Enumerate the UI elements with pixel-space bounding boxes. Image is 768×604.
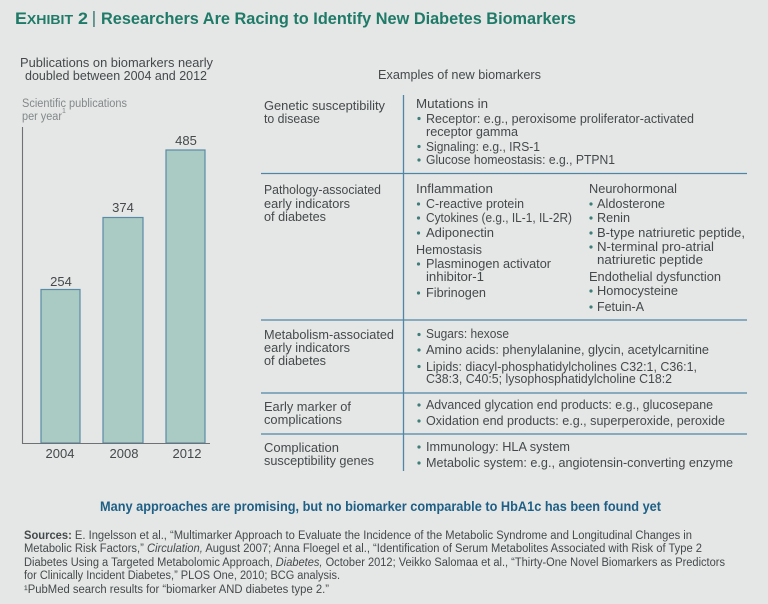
bar 2004: 2004 <box>46 446 74 461</box>
row: pathology-associated: natriuretic peptide <box>597 252 703 267</box>
axes <box>22 127 210 444</box>
row: genetic susceptibility: Mutations in <box>416 96 488 111</box>
axis label: per year <box>22 111 62 123</box>
row: pathology-associated: Renin <box>597 210 630 225</box>
table of biomarkers <box>261 95 747 471</box>
row: pathology-associated: Endothelial dysfunction <box>589 269 721 284</box>
sources footnote: Metabolic Risk Factors,” Circulation, August 2007; Anna Floegel et al., “Identification of Serum Metabolites Associated with Risk of Type 2 <box>24 543 702 555</box>
row: pathology-associated: early indicators <box>264 196 350 211</box>
bar 2008 <box>103 200 143 461</box>
row: metabolism-associated: of diabetes <box>264 353 326 368</box>
row: genetic susceptibility: Genetic susceptibility <box>264 98 385 113</box>
row: pathology-associated: Cytokines (e.g., IL-1, IL-2R) <box>426 210 572 225</box>
row: genetic susceptibility: to disease <box>264 111 320 126</box>
bar chart <box>22 98 210 461</box>
row: pathology-associated: B-type natriuretic peptide, <box>597 225 745 240</box>
row: genetic susceptibility <box>264 96 694 167</box>
sources footnote: for Clinically Incident Diabetes,” PLOS One, 2010; BCG analysis. <box>24 570 340 582</box>
row: early marker: Early marker of <box>264 399 351 414</box>
row: pathology-associated: inhibitor-1 <box>426 269 484 284</box>
row: pathology-associated: C-reactive protein <box>426 196 524 211</box>
row: pathology-associated: of diabetes <box>264 209 326 224</box>
bar 2008: 374 <box>112 200 134 215</box>
row: metabolism-associated: Sugars: hexose <box>426 326 509 341</box>
row: metabolism-associated: C38:3, C40:5; lysophosphatidylcholine C18:2 <box>426 371 672 386</box>
row: pathology-associated <box>264 181 745 314</box>
row: metabolism-associated: Amino acids: phenylalanine, glycin, acetylcarnitine <box>426 342 709 357</box>
table heading: Examples of new biomarkers <box>378 67 541 82</box>
bar 2004: 254 <box>50 274 72 289</box>
row: complication genes: susceptibility genes <box>264 453 374 468</box>
row: pathology-associated: Aldosterone <box>597 196 665 211</box>
row: genetic susceptibility: Receptor: e.g., peroxisome proliferator-activated <box>426 111 694 126</box>
row: pathology-associated: Pathology-associated <box>264 182 381 197</box>
row: pathology-associated: Hemostasis <box>416 242 482 257</box>
chart heading <box>20 55 213 83</box>
row: pathology-associated: Adiponectin <box>426 225 494 240</box>
row: early marker <box>264 397 725 428</box>
sources footnote <box>24 530 725 596</box>
row: pathology-associated: N-terminal pro-atrial <box>597 239 714 254</box>
chart heading: doubled between 2004 and 2012 <box>25 68 207 83</box>
bar 2012: 485 <box>175 133 197 148</box>
axis label <box>22 98 127 123</box>
row: complication genes: Complication <box>264 440 339 455</box>
bar 2004 <box>41 274 80 461</box>
bar 2012 <box>166 133 205 461</box>
row: pathology-associated: Fibrinogen <box>426 285 486 300</box>
sources footnote: ¹PubMed search results for “biomarker AND diabetes type 2.” <box>24 584 329 596</box>
axis label: 1 <box>62 108 66 115</box>
row: pathology-associated: Inflammation <box>416 181 493 196</box>
row: pathology-associated: Fetuin-A <box>597 299 644 314</box>
row: metabolism-associated: Lipids: diacyl-phosphatidylcholines C32:1, C36:1, <box>426 359 697 374</box>
bar 2012: 2012 <box>173 446 201 461</box>
chart heading: Publications on biomarkers nearly <box>20 55 213 70</box>
row: genetic susceptibility: Glucose homeostasis: e.g., PTPN1 <box>426 152 615 167</box>
row: pathology-associated: Neurohormonal <box>589 181 677 196</box>
bar 2008: 2008 <box>110 446 138 461</box>
row: early marker: Advanced glycation end products: e.g., glucosepane <box>426 397 713 412</box>
row: early marker: Oxidation end products: e.g., superperoxide, peroxide <box>426 413 725 428</box>
axis label: Scientific publications <box>22 98 127 110</box>
sources footnote: Diabetes Using a Targeted Metabolomic Approach, Diabetes, October 2012; Veikko Salomaa et al., “Thirty-One Novel Biomarkers as Predictors <box>24 557 725 569</box>
row: pathology-associated: Homocysteine <box>597 283 678 298</box>
row: genetic susceptibility: Signaling: e.g., IRS-1 <box>426 139 540 154</box>
row: complication genes: Immunology: HLA system <box>426 439 570 454</box>
row: early marker: complications <box>264 412 342 427</box>
sources footnote: Sources: E. Ingelsson et al., “Multimarker Approach to Evaluate the Incidence of the Metabolic Syndrome and Longitudinal Changes in <box>24 530 692 542</box>
row: metabolism-associated: Metabolism-associated <box>264 327 394 342</box>
row: metabolism-associated <box>264 326 709 386</box>
takeaway callout: Many approaches are promising, but no biomarker comparable to HbA1c has been found yet <box>100 498 661 514</box>
row: genetic susceptibility: receptor gamma <box>426 124 519 139</box>
title: EXHIBIT 2 <box>15 10 88 28</box>
title: Researchers Are Racing to Identify New Diabetes Biomarkers <box>101 10 576 28</box>
row: metabolism-associated: early indicators <box>264 340 350 355</box>
row: complication genes: Metabolic system: e.g., angiotensin-converting enzyme <box>426 455 733 470</box>
row: complication genes <box>264 439 733 470</box>
row: pathology-associated: Plasminogen activator <box>426 256 552 271</box>
